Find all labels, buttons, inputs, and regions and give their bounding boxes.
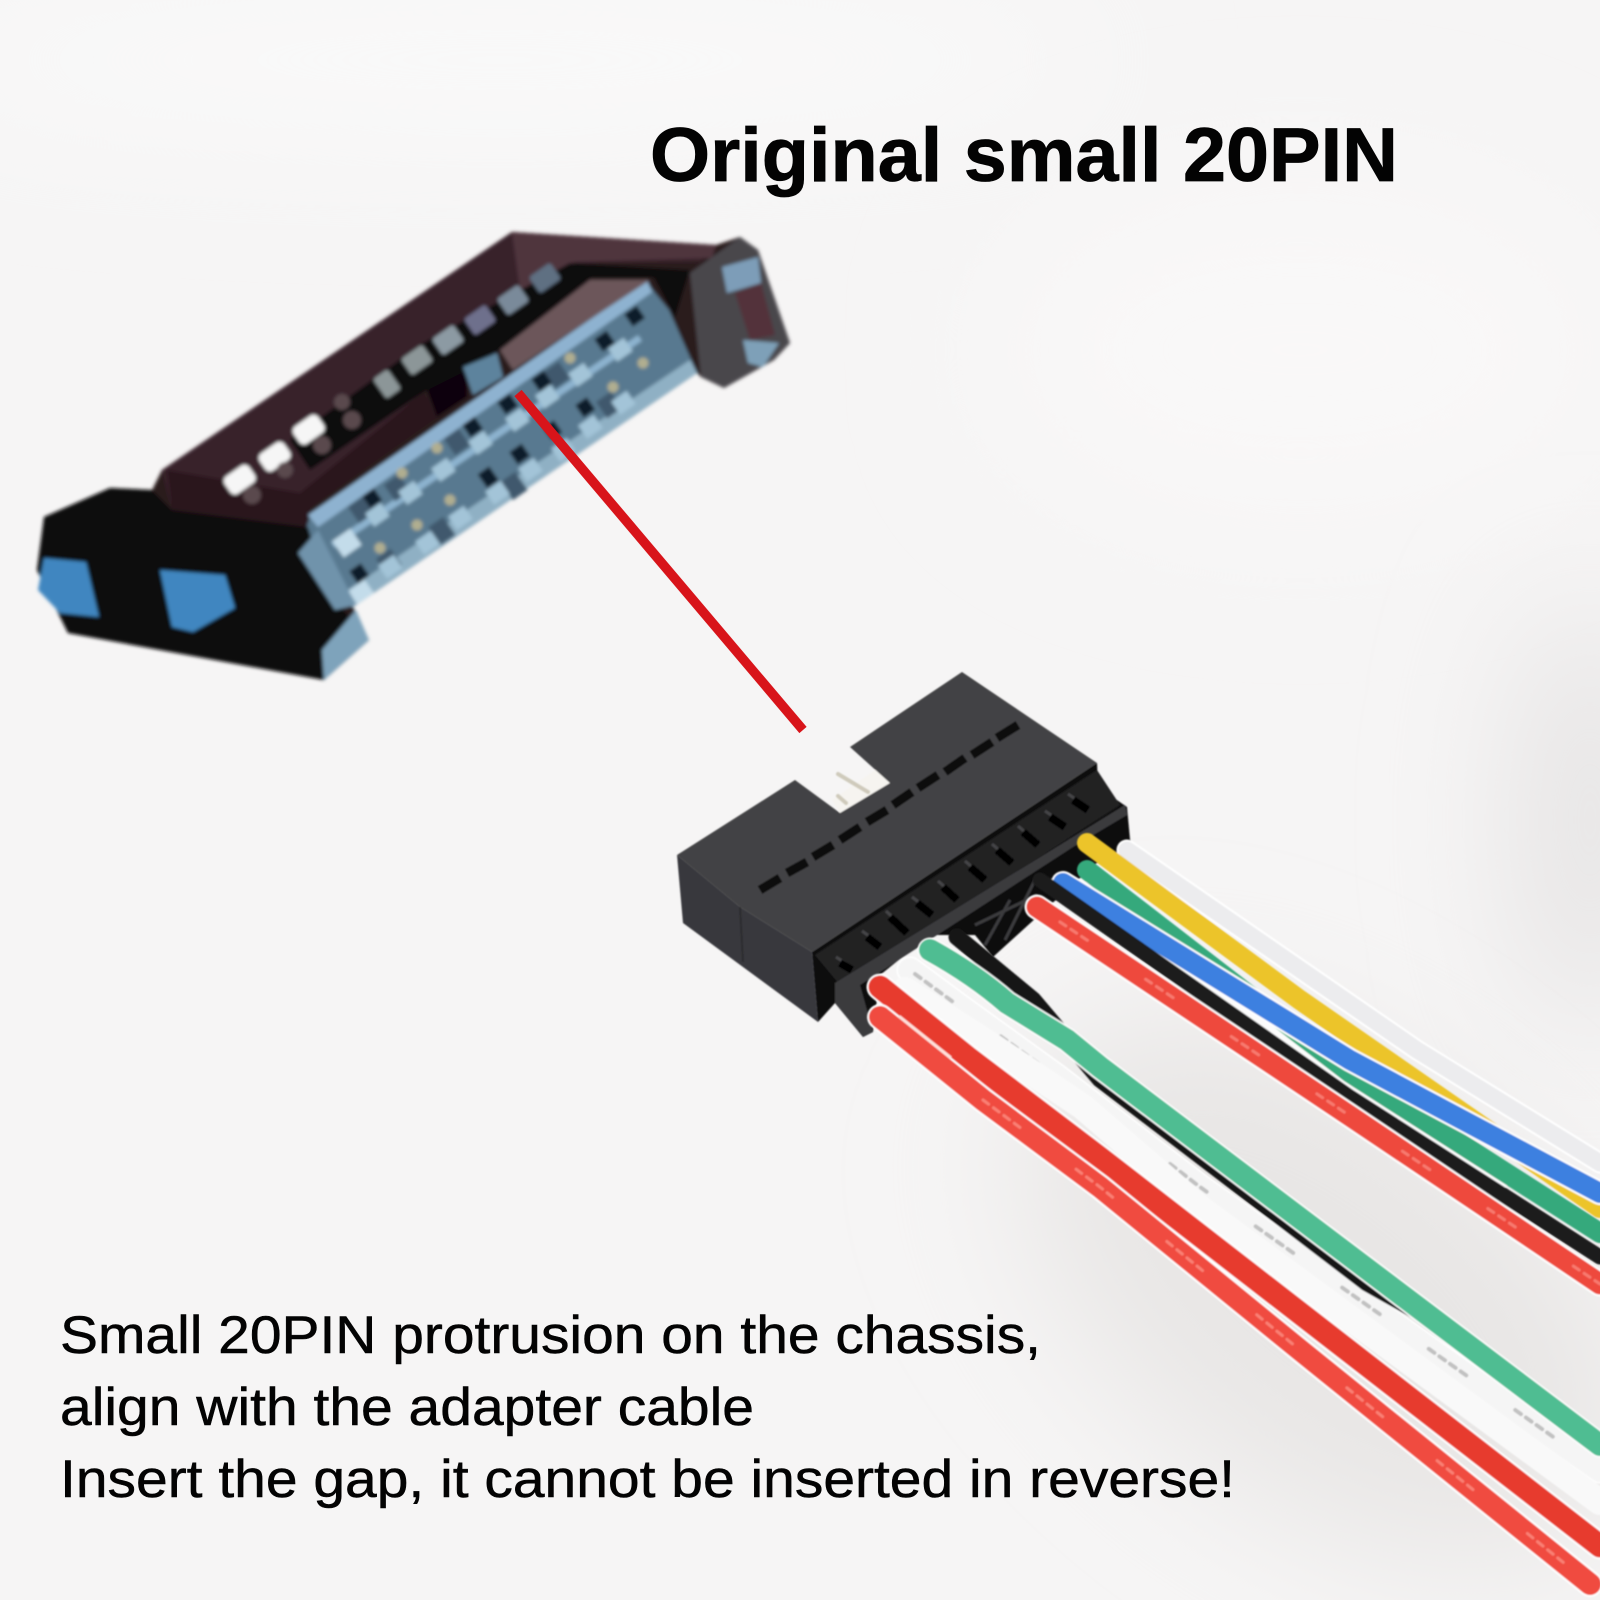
title: Original small 20PIN <box>650 113 1398 198</box>
left side wall <box>677 855 818 1022</box>
wire red lower <box>880 1017 1590 1584</box>
icon: black 20PIN adapter connector <box>677 672 1131 1037</box>
icon: chassis 20PIN socket photo <box>37 232 790 680</box>
wire blue <box>1063 883 1600 1193</box>
socket body silhouette <box>37 232 790 680</box>
front shell dark <box>812 763 1131 1037</box>
cavity lattice <box>975 880 1037 945</box>
white contacts <box>221 412 327 497</box>
inner brown key <box>500 280 650 370</box>
top surface with notch <box>677 672 1097 952</box>
wire white top <box>1127 850 1600 1163</box>
socket holes: shadow cells <box>348 362 622 575</box>
dark inner band <box>167 393 437 527</box>
light upper strip <box>308 280 652 527</box>
socket holes: light cells <box>332 338 636 604</box>
white highlight between red wires <box>900 1017 950 1057</box>
wire yellow <box>1087 843 1600 1208</box>
grey contacts <box>373 262 561 399</box>
wire green lower <box>930 950 1600 1445</box>
wire red upper <box>880 987 1600 1546</box>
rear metal pins in the notch <box>832 768 890 813</box>
wire black lower <box>957 937 1440 1324</box>
comb area <box>815 770 1120 985</box>
red alignment line <box>518 393 803 730</box>
socket holes: dark cells <box>349 306 645 584</box>
right end block <box>690 237 790 388</box>
light lower strip <box>345 360 697 607</box>
left end blue windows <box>38 558 99 617</box>
slot row on top <box>760 725 1018 890</box>
light middle band <box>333 338 640 545</box>
cable wires: upper group <box>1037 843 1600 1284</box>
wire white front <box>905 990 1600 1502</box>
line 3: Insert the gap, it cannot be inserted in reverse! <box>60 1450 1235 1509</box>
line 1: Small 20PIN protrusion on the chassis, <box>60 1306 1041 1365</box>
wire white middle <box>1090 890 1500 1180</box>
brown contacts <box>243 394 361 504</box>
blue-grey pin face <box>298 283 697 607</box>
wire thin green edge <box>1200 1212 1600 1505</box>
instruction text block <box>60 1306 1235 1509</box>
comb slits <box>840 800 1088 970</box>
brown top edge <box>162 232 716 510</box>
black pin channel <box>290 263 690 470</box>
wire red <box>1037 907 1600 1284</box>
wire white printed <box>910 970 1600 1470</box>
line 2: align with the adapter cable <box>60 1378 754 1437</box>
comb ribs <box>836 794 1083 964</box>
wire black <box>1040 880 1600 1257</box>
left end block <box>37 488 369 680</box>
wire green <box>1087 870 1600 1233</box>
socket tan pin tips <box>374 352 648 554</box>
cable wires: lower group <box>880 937 1600 1584</box>
connector rim <box>835 805 1127 1037</box>
